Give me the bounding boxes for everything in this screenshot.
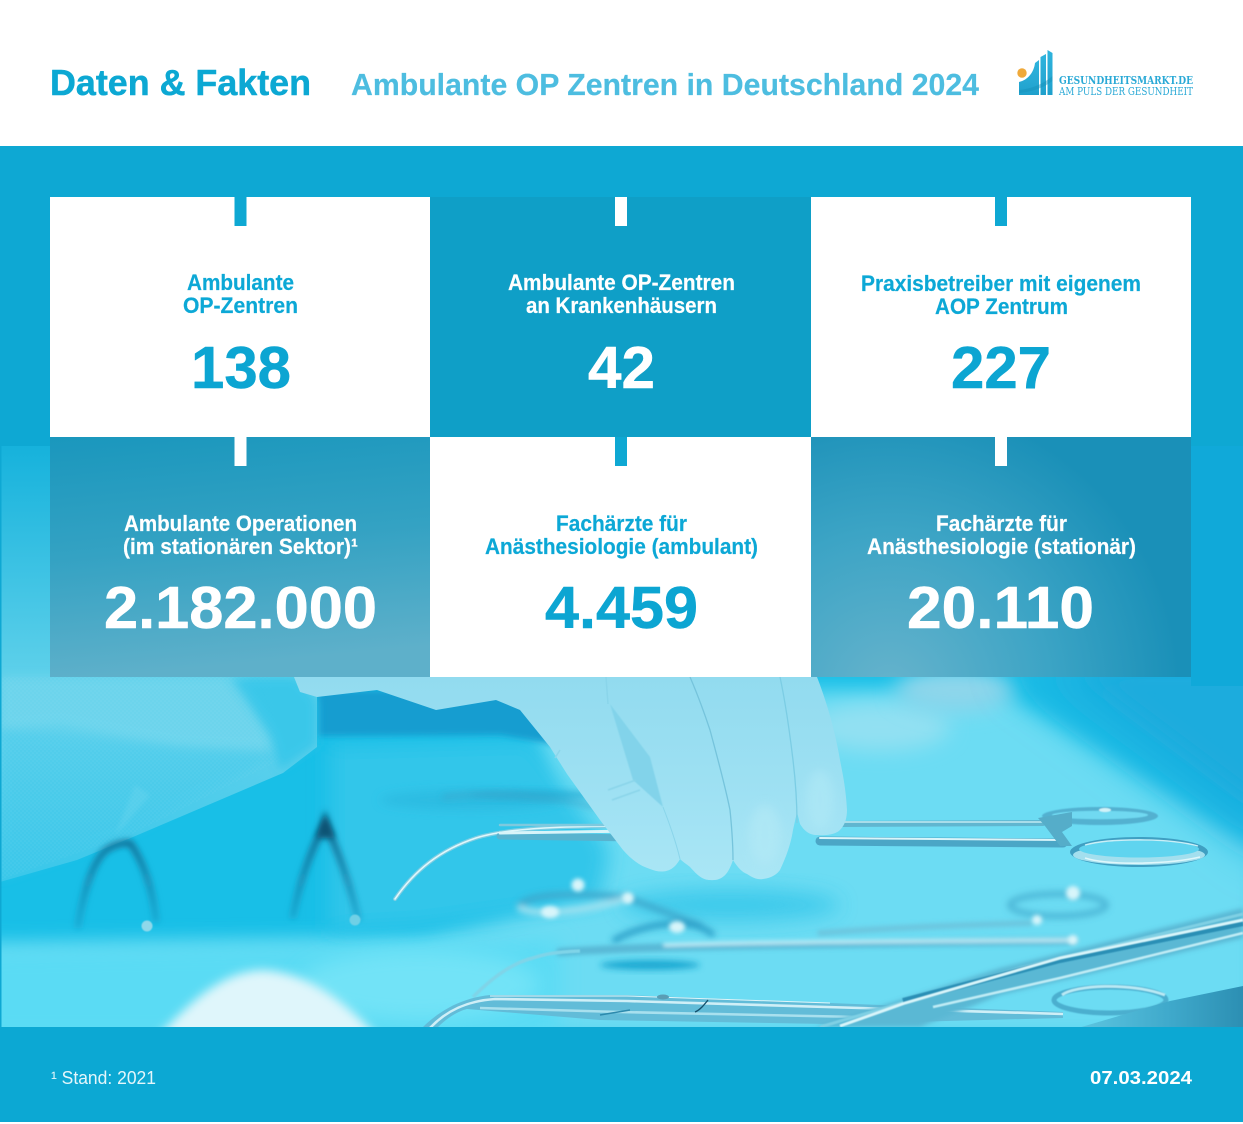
- panel: Fachärzte für Anästhesiologie (stationär): Anästhesiologie (stationär): [867, 534, 1136, 559]
- table light areas: [0, 690, 1243, 1040]
- header background: [0, 0, 1243, 146]
- front lower clamp: [422, 994, 1063, 1028]
- logo: Gesundheitsmarkt.de: GESUNDHEITSMARKT.DE: [1059, 73, 1193, 87]
- panel: Ambulante OP-Zentren: OP-Zentren: [183, 293, 298, 318]
- panel: Fachärzte für Anästhesiologie (stationär): Fachärzte für: [936, 511, 1067, 536]
- glove: [294, 677, 847, 880]
- panel: Fachärzte für Anästhesiologie (ambulant): 4.459: [545, 575, 698, 641]
- panel: Ambulante Operationen im stationären Sektor: 2.182.000: [104, 575, 377, 641]
- photo edge lines: [0, 446, 2, 1027]
- panel: Ambulante OP-Zentren an Krankenhäusern: Ambulante OP-Zentren: [508, 270, 735, 295]
- panel: Ambulante Operationen im stationären Sektor: [50, 437, 430, 677]
- footer band: [0, 1027, 1243, 1122]
- footnote: ¹ Stand: 2021: [51, 1068, 156, 1088]
- left-of-hand zone: [330, 740, 610, 930]
- logo: Gesundheitsmarkt.de: AM PULS DER GESUNDHEIT: [1058, 85, 1194, 98]
- lower ring: [1054, 986, 1166, 1013]
- panel: Praxisbetreiber mit eigenem AOP Zentrum: 227: [951, 335, 1051, 401]
- drape: [0, 446, 317, 882]
- panel: Fachärzte für Anästhesiologie (stationär): 20.110: [907, 575, 1094, 641]
- date: 07.03.2024: [1090, 1068, 1192, 1088]
- title: Daten & Fakten: Daten & Fakten: [50, 62, 311, 103]
- diagonal scissors: [815, 908, 1243, 1027]
- blurred back instruments: [445, 794, 1106, 940]
- lower-right dark corner: [1078, 986, 1243, 1028]
- photo: gloved hand with surgical instruments: [0, 446, 1243, 1045]
- panel: Praxisbetreiber mit eigenem AOP Zentrum: [811, 197, 1191, 437]
- gauze: [150, 970, 385, 1045]
- panel: Ambulante OP-Zentren an Krankenhäusern: 42: [588, 335, 655, 401]
- panel: Ambulante OP-Zentren: 138: [191, 335, 291, 401]
- panel: Ambulante OP-Zentren an Krankenhäusern: [430, 197, 811, 437]
- panel: Fachärzte für Anästhesiologie (stationär): [811, 437, 1191, 677]
- panel: Ambulante OP-Zentren an Krankenhäusern: an Krankenhäusern: [526, 293, 717, 318]
- shadow under the glove: [317, 690, 560, 745]
- logo: Gesundheitsmarkt.de: [1017, 50, 1194, 98]
- panel: Ambulante Operationen im stationären Sektor: (im stationären Sektor)¹: [123, 534, 358, 559]
- panel: Fachärzte für Anästhesiologie (ambulant): [430, 437, 811, 677]
- panel: Ambulante OP-Zentren: Ambulante: [187, 270, 294, 295]
- panel: Ambulante Operationen im stationären Sektor: Ambulante Operationen: [124, 511, 357, 536]
- panel: Fachärzte für Anästhesiologie (ambulant): Anästhesiologie (ambulant): [485, 534, 758, 559]
- main clamp shank and rings: [395, 807, 1208, 899]
- panel: Fachärzte für Anästhesiologie (ambulant): Fachärzte für: [556, 511, 687, 536]
- blurred forceps on the table: [78, 824, 358, 926]
- panel: Praxisbetreiber mit eigenem AOP Zentrum: Praxisbetreiber mit eigenem: [861, 271, 1141, 296]
- soft lights upper right: [810, 703, 950, 751]
- top blue band: [0, 146, 1243, 447]
- subtitle: Ambulante OP Zentren in Deutschland 2024: [351, 67, 980, 102]
- panel: Praxisbetreiber mit eigenem AOP Zentrum: AOP Zentrum: [935, 294, 1068, 319]
- panel: Ambulante OP-Zentren: [50, 197, 430, 437]
